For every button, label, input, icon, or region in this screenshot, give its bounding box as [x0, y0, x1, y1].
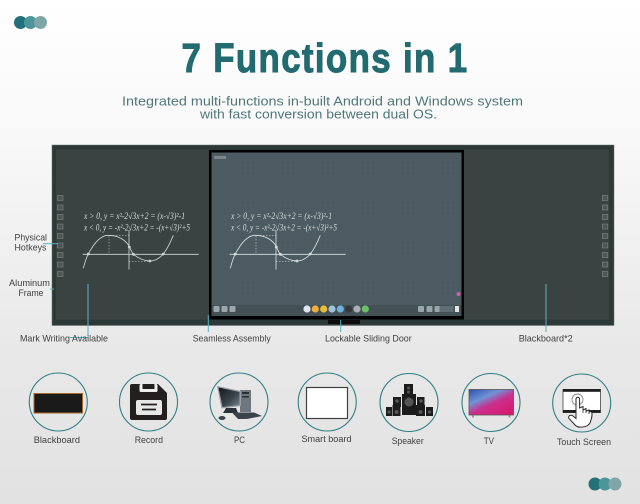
label: blackboard: Blackboard: [34, 435, 80, 446]
center handwriting formula: x > 0, y = x²-2√3x+2 = (x-√3)²-1: [230, 211, 332, 221]
left handwriting formula: x > 0, y = x²-2√3x+2 = (x-√3)²-1: [83, 211, 185, 221]
label: lockable door: Lockable Sliding Door: [325, 334, 412, 344]
left handwriting formula: x < 0, y = -x²-2√3x+2 = -(x+√3)²+5: [83, 222, 190, 232]
icon: tv: [462, 374, 520, 432]
left function graph: [83, 230, 199, 270]
label: blackboard x2: Blackboard*2: [519, 334, 573, 344]
label: physical hotkeys: Hotkeys: [14, 242, 47, 254]
label: pc: PC: [234, 435, 245, 446]
subtitle: Integrated multi-functions in-built Android and Windows system: [122, 94, 523, 108]
center handwriting formula: x < 0, y = -x²-2√3x+2 = -(x+√3)²+5: [230, 222, 337, 232]
lockable sliding door: [328, 320, 360, 324]
icon: smart board: [298, 373, 356, 431]
label: aluminum frame: Frame: [18, 288, 44, 299]
left handwriting formula: [83, 211, 190, 232]
icon: record floppy disk: [120, 373, 178, 431]
label: seamless assembly: Seamless Assembly: [193, 334, 271, 344]
label: physical hotkeys: [14, 232, 47, 254]
logo dots: top left: [14, 16, 47, 29]
label: physical hotkeys: Physical: [14, 232, 47, 244]
callout lines: [43, 244, 546, 338]
center handwriting formula: [230, 211, 337, 232]
label: record: Record: [135, 435, 163, 446]
panel: nano blackboard product: [52, 145, 614, 326]
logo dots: bottom right: [588, 478, 622, 490]
label: aluminum frame: Aluminum: [9, 278, 50, 289]
panel: right blackboard: [464, 150, 609, 320]
icon: blackboard: [29, 373, 87, 431]
screen toolbar: [214, 292, 460, 313]
panel: left blackboard: [56, 150, 209, 320]
subtitle: [122, 94, 523, 122]
icon: speaker: [380, 374, 438, 432]
label: aluminum frame: [9, 278, 50, 299]
label: speaker: Speaker: [392, 436, 424, 447]
panel: center touch screen: [209, 150, 464, 320]
center function graph: [230, 230, 346, 270]
subtitle: with fast conversion between dual OS.: [199, 106, 437, 122]
label: touch screen: Touch Screen: [557, 437, 611, 448]
aluminum frame: [52, 145, 614, 326]
label: smart board: Smart board: [302, 434, 352, 445]
icon: pc: [210, 373, 268, 431]
left physical hotkeys: [58, 196, 63, 276]
label: tv: TV: [484, 436, 495, 447]
title: 7 Functions in 1: [182, 36, 467, 82]
label: mark writing: Mark Writing Available: [20, 334, 108, 344]
right physical hotkeys: [602, 196, 608, 276]
icon: touch screen: [553, 374, 611, 432]
